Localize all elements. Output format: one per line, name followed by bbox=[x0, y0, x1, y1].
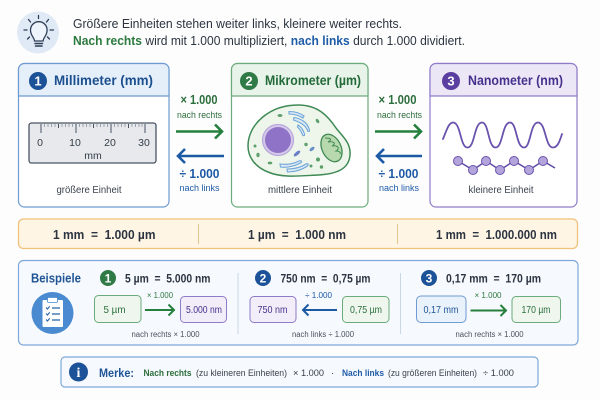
panel: Beispiele bbox=[18, 260, 578, 345]
badge 1 bbox=[29, 72, 47, 90]
example 2: 2 bbox=[260, 272, 267, 286]
example 3 bbox=[416, 270, 560, 339]
example 2: 750 nm = 0,75 µm bbox=[280, 274, 370, 286]
arrows: Mikrometer to Nanometer: ÷ 1.000 bbox=[378, 167, 419, 181]
badge 2: 2 bbox=[245, 74, 253, 88]
callout: Merke bbox=[61, 357, 538, 387]
icon: ruler: 0 bbox=[37, 137, 43, 149]
icon: wave bbox=[443, 122, 562, 148]
example 1: 1 bbox=[105, 272, 112, 286]
example 1: × 1.000 bbox=[147, 291, 174, 300]
example 2: 0,75 µm bbox=[350, 304, 382, 316]
example 1 bbox=[94, 270, 226, 339]
example 2 bbox=[250, 270, 389, 339]
panel title: Nanometer (nm) bbox=[468, 72, 563, 88]
icon: ruler bbox=[29, 123, 156, 163]
panel title: Millimeter (mm) bbox=[54, 72, 153, 88]
icon: ruler: mm bbox=[84, 150, 102, 162]
example 3: 0,17 mm = 170 µm bbox=[446, 274, 541, 286]
example 3: × 1.000 bbox=[474, 291, 502, 300]
arrows: Millimeter to Mikrometer: nach rechts bbox=[177, 110, 222, 120]
badge 3 bbox=[442, 72, 460, 90]
Merke text: (zu kleineren Einheiten) bbox=[196, 368, 287, 379]
Merke text: ÷ 1.000 bbox=[483, 368, 514, 379]
icon: molecule chain bbox=[454, 156, 555, 174]
example 3: 170 µm bbox=[522, 304, 551, 316]
Merke text: Nach links bbox=[342, 368, 384, 379]
Merke text: Merke: bbox=[99, 366, 134, 380]
panel: Mikrometer bbox=[232, 64, 368, 207]
example 3: 0,17 mm bbox=[424, 304, 459, 316]
Merke text: × 1.000 bbox=[293, 368, 324, 379]
example 1: 5 µm = 5.000 nm bbox=[125, 274, 210, 286]
heading: intro text: Größere Einheiten stehen weiter links, kleinere weiter rechts. bbox=[73, 16, 402, 31]
arrows: Millimeter to Mikrometer bbox=[176, 93, 224, 193]
example 1: 5 µm bbox=[104, 304, 126, 316]
example 2: 750 nm bbox=[258, 304, 288, 316]
heading: intro text bbox=[73, 16, 465, 48]
arrows: Mikrometer to Nanometer: × 1.000 bbox=[378, 93, 417, 107]
arrows: Mikrometer to Nanometer: nach rechts bbox=[377, 110, 422, 120]
icon: ruler: 10 bbox=[69, 137, 81, 149]
icon: ruler: 30 bbox=[138, 137, 150, 149]
arrows: Mikrometer to Nanometer bbox=[375, 93, 422, 193]
conversion band: 1 mm = 1.000 µm bbox=[53, 227, 156, 242]
heading: Beispiele: Beispiele bbox=[31, 272, 81, 286]
badge 2 bbox=[240, 72, 258, 90]
example 1: nach rechts × 1.000 bbox=[132, 330, 200, 339]
icon: info bbox=[69, 362, 88, 382]
arrows: Millimeter to Mikrometer: nach links bbox=[180, 183, 220, 193]
icon: clipboard bbox=[32, 292, 74, 334]
Merke text: (zu größeren Einheiten) bbox=[388, 368, 477, 379]
example 3: nach rechts × 1.000 bbox=[456, 330, 524, 339]
conversion band bbox=[18, 219, 578, 248]
Merke text bbox=[99, 366, 514, 380]
caption: mittlere Einheit bbox=[268, 185, 332, 196]
arrows: Millimeter to Mikrometer: ÷ 1.000 bbox=[180, 167, 220, 181]
Merke text: Nach rechts bbox=[144, 368, 192, 379]
example 2: nach links ÷ 1.000 bbox=[292, 330, 355, 339]
conversion band: 1 mm = 1.000.000 nm bbox=[436, 227, 557, 242]
icon: cell bbox=[248, 105, 350, 176]
example 2: ÷ 1.000 bbox=[305, 291, 333, 300]
example 1: 5.000 nm bbox=[186, 305, 222, 316]
panel: Nanometer bbox=[430, 64, 577, 207]
icon: info: i bbox=[77, 366, 81, 381]
panel title: Mikrometer (µm) bbox=[265, 72, 361, 88]
arrows: Mikrometer to Nanometer: nach links bbox=[379, 183, 419, 193]
panel: Millimeter bbox=[18, 64, 169, 207]
heading: intro text: Nach rechts wird mit 1.000 multipliziert, nach links durch 1.000 dividiert. bbox=[73, 33, 465, 48]
caption: größere Einheit bbox=[56, 185, 122, 196]
arrows: Millimeter to Mikrometer: × 1.000 bbox=[180, 93, 218, 107]
icon: light bulb bbox=[17, 12, 59, 54]
badge 3: 3 bbox=[447, 74, 455, 88]
badge 1: 1 bbox=[34, 74, 42, 88]
conversion band: 1 µm = 1.000 nm bbox=[248, 227, 346, 242]
Merke text: · bbox=[331, 368, 334, 379]
example 3: 3 bbox=[426, 272, 433, 286]
caption: kleinere Einheit bbox=[468, 185, 534, 196]
icon: ruler: 20 bbox=[104, 137, 116, 149]
